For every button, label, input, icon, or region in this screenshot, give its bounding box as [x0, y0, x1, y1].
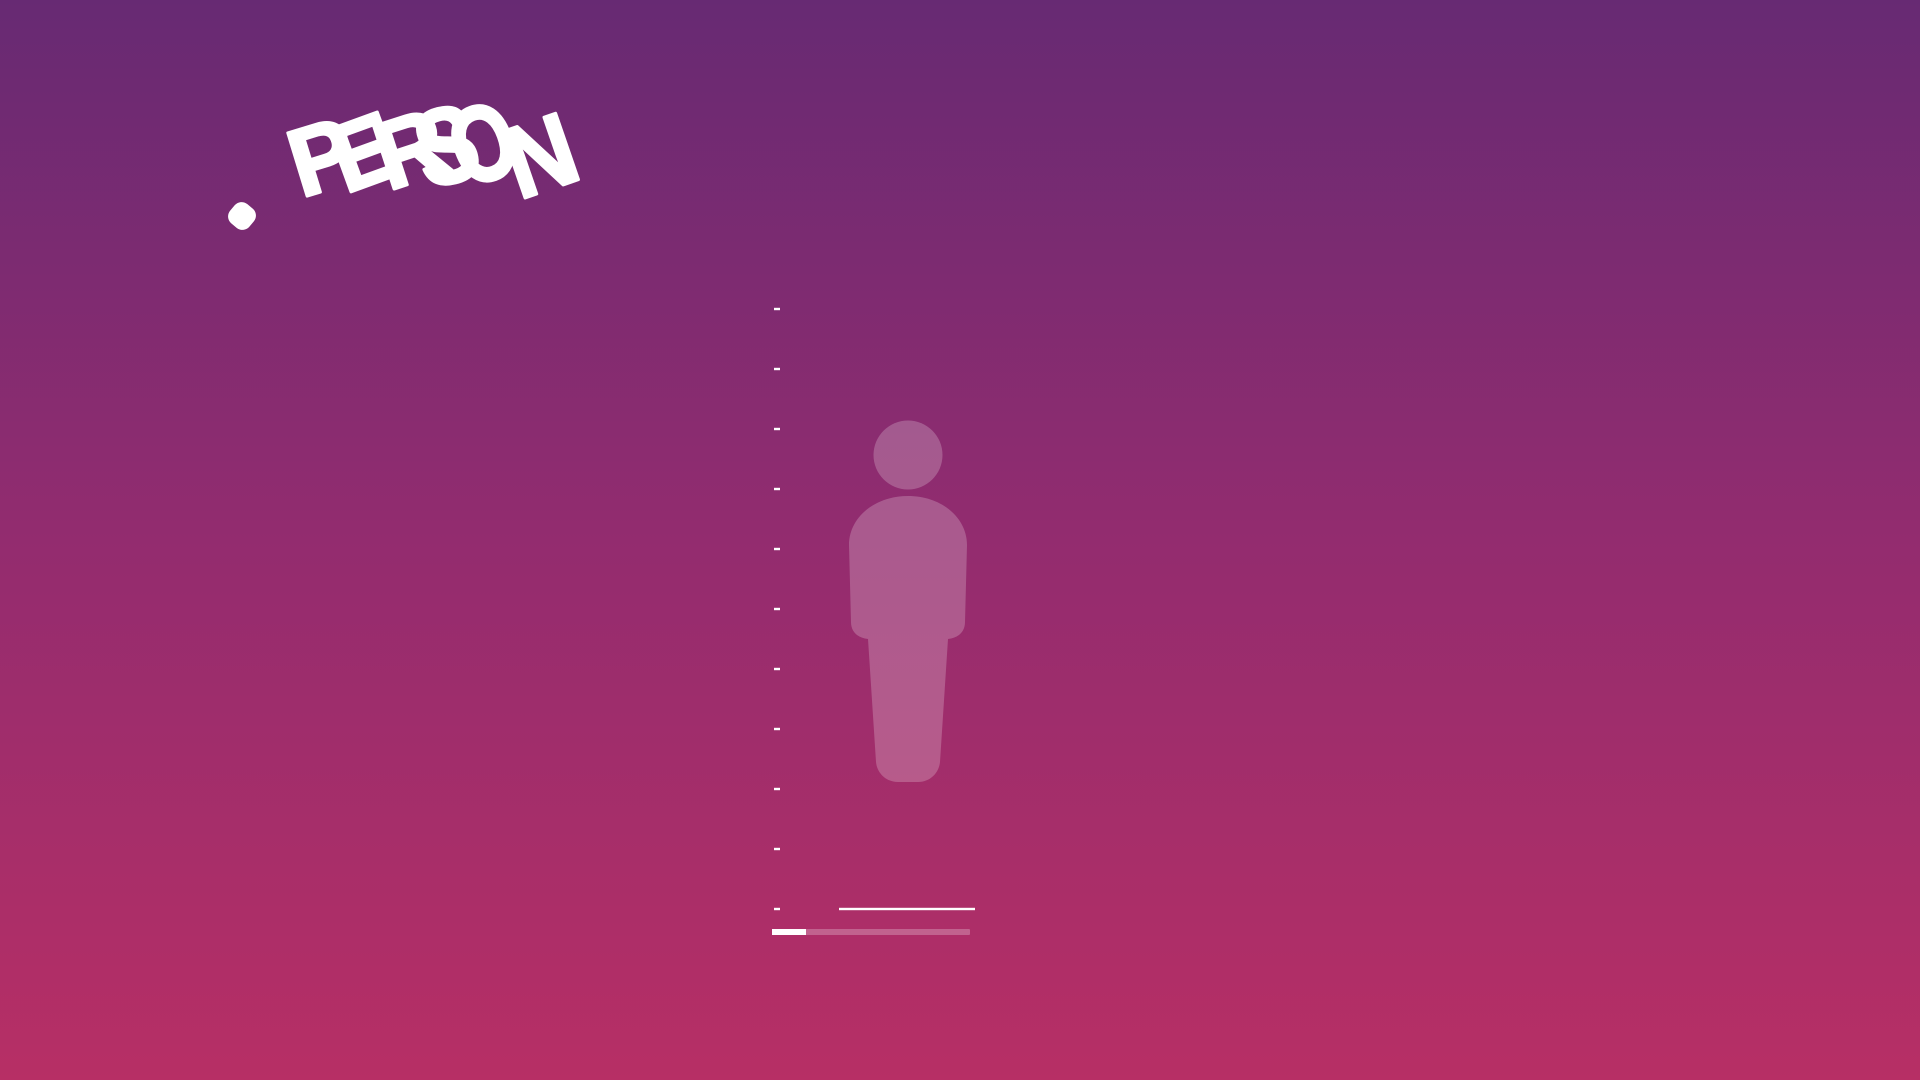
bullet dot [224, 198, 260, 234]
title: PERSON: O [433, 77, 534, 211]
height scale ticks [774, 308, 780, 910]
title: PERSON: E [316, 91, 412, 214]
title: PERSON: N [489, 90, 592, 220]
icon: person silhouette [849, 420, 967, 782]
baseline line [839, 908, 975, 910]
title: PERSON: R [361, 88, 460, 211]
title: PERSON: P [276, 97, 368, 218]
progress bar [772, 929, 970, 935]
title: PERSON: S [403, 81, 491, 212]
title: PERSON [276, 77, 592, 220]
